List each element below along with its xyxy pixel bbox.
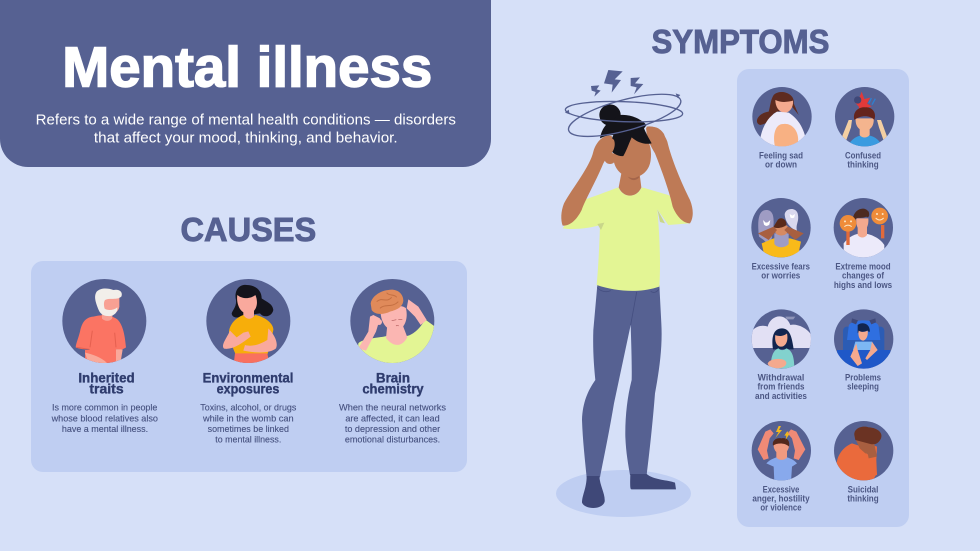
symptoms heading: SYMPTOMS [652, 23, 830, 60]
text: environmental exposures: Toxins, alcohol, or drugs [200, 402, 297, 413]
text: brain chemistry: Brain [376, 371, 410, 386]
icon: brain [350, 279, 437, 367]
text: confused thinking: Confused [845, 150, 881, 160]
text: environmental exposures: exposures [217, 381, 279, 396]
text: suicidal thinking [847, 484, 879, 504]
ground shadow [556, 470, 691, 517]
symptom: withdrawal [750, 309, 812, 401]
panel: causes [31, 261, 467, 472]
icon: head in hand [834, 421, 893, 482]
symptom: feeling sad [752, 87, 812, 169]
hair [599, 104, 621, 126]
text: mood changes: highs and lows [834, 280, 892, 290]
panel: symptoms [737, 69, 909, 527]
text: excessive fears: Excessive fears [752, 261, 810, 271]
text: problems sleeping [845, 372, 881, 392]
text: brain chemistry: chemistry [362, 381, 424, 396]
text: excessive fears [752, 261, 810, 281]
text: mood changes: Extreme mood [835, 261, 891, 271]
text: brain chemistry: emotional disturbances. [345, 434, 440, 445]
text: confused thinking [845, 150, 881, 169]
hands [598, 137, 615, 160]
text: anger: anger, hostility [752, 494, 810, 504]
text: problems sleeping: Problems [845, 372, 881, 382]
icon: angry man [752, 421, 811, 482]
text: feeling sad [759, 150, 803, 169]
symptom: anger [752, 421, 811, 513]
text: environmental exposures: to mental illness. [215, 434, 281, 445]
text: mood changes [834, 261, 892, 290]
symptom: confused thinking [835, 87, 894, 169]
icon: fears [751, 198, 811, 260]
neck [619, 172, 641, 196]
text: brain chemistry: to depression and other [345, 423, 440, 434]
icon: lightning bolts [591, 70, 643, 97]
text: environmental exposures: Environmental [203, 371, 293, 386]
icon: pregnant woman [206, 279, 290, 367]
text: feeling sad: or down [765, 159, 797, 169]
torso and head [561, 70, 693, 291]
text: suicidal thinking: thinking [847, 494, 879, 504]
cause: environmental exposures [200, 279, 297, 445]
icon: sad woman [752, 87, 812, 148]
text: anger: or violence [760, 503, 802, 513]
text: inherited traits: Is more common in people [52, 402, 157, 413]
description [36, 111, 456, 147]
title: Mental illness [62, 36, 432, 100]
header banner [0, 0, 491, 167]
icon: confused man [835, 87, 894, 148]
text: feeling sad: Feeling sad [759, 150, 803, 160]
text: environmental exposures: while in the womb can [202, 412, 294, 423]
text: brain chemistry: When the neural networks [339, 402, 446, 413]
cause: inherited traits [51, 279, 158, 434]
symptom: excessive fears [751, 198, 811, 281]
symptom: mood changes [834, 198, 893, 290]
causes heading: CAUSES [181, 211, 316, 248]
text: inherited traits: whose blood relatives also [51, 412, 158, 423]
text: environmental exposures [200, 371, 297, 445]
central figure: dizzy woman [556, 70, 693, 517]
icon: mood masks [834, 198, 893, 258]
arms [561, 136, 613, 226]
text: withdrawal [755, 372, 807, 401]
symptom: suicidal thinking [834, 421, 893, 504]
text: environmental exposures: sometimes be linked [208, 423, 289, 434]
text: excessive fears: or worries [761, 271, 800, 281]
legs and shoes [582, 285, 676, 508]
cause: brain chemistry [339, 279, 446, 445]
icon: sleepless [834, 309, 893, 372]
text: mood changes: changes of [842, 271, 885, 281]
icon: dizzy orbits [565, 86, 685, 145]
text: withdrawal: from friends [758, 382, 804, 392]
face [613, 136, 651, 177]
text: brain chemistry [339, 371, 446, 445]
icon: elderly man [62, 279, 146, 367]
shirt [563, 187, 689, 291]
text: withdrawal: and activities [755, 391, 807, 401]
text: inherited traits [51, 371, 158, 434]
text: problems sleeping: sleeping [847, 382, 879, 392]
text: withdrawal: Withdrawal [758, 372, 804, 382]
text: suicidal thinking: Suicidal [848, 484, 878, 494]
text: inherited traits: Inherited [78, 371, 135, 386]
text: inherited traits: have a mental illness. [62, 423, 148, 434]
text: confused thinking: thinking [847, 159, 879, 169]
symptom: problems sleeping [834, 309, 893, 392]
description: that affect your mood, thinking, and behavior. [94, 130, 398, 147]
text: brain chemistry: are affected, it can lead [345, 412, 440, 423]
icon: withdrawal [750, 309, 812, 369]
text: anger [752, 484, 810, 513]
description: Refers to a wide range of mental health conditions — disorders [36, 111, 456, 128]
text: inherited traits: traits [89, 381, 124, 396]
text: anger: Excessive [763, 484, 799, 494]
